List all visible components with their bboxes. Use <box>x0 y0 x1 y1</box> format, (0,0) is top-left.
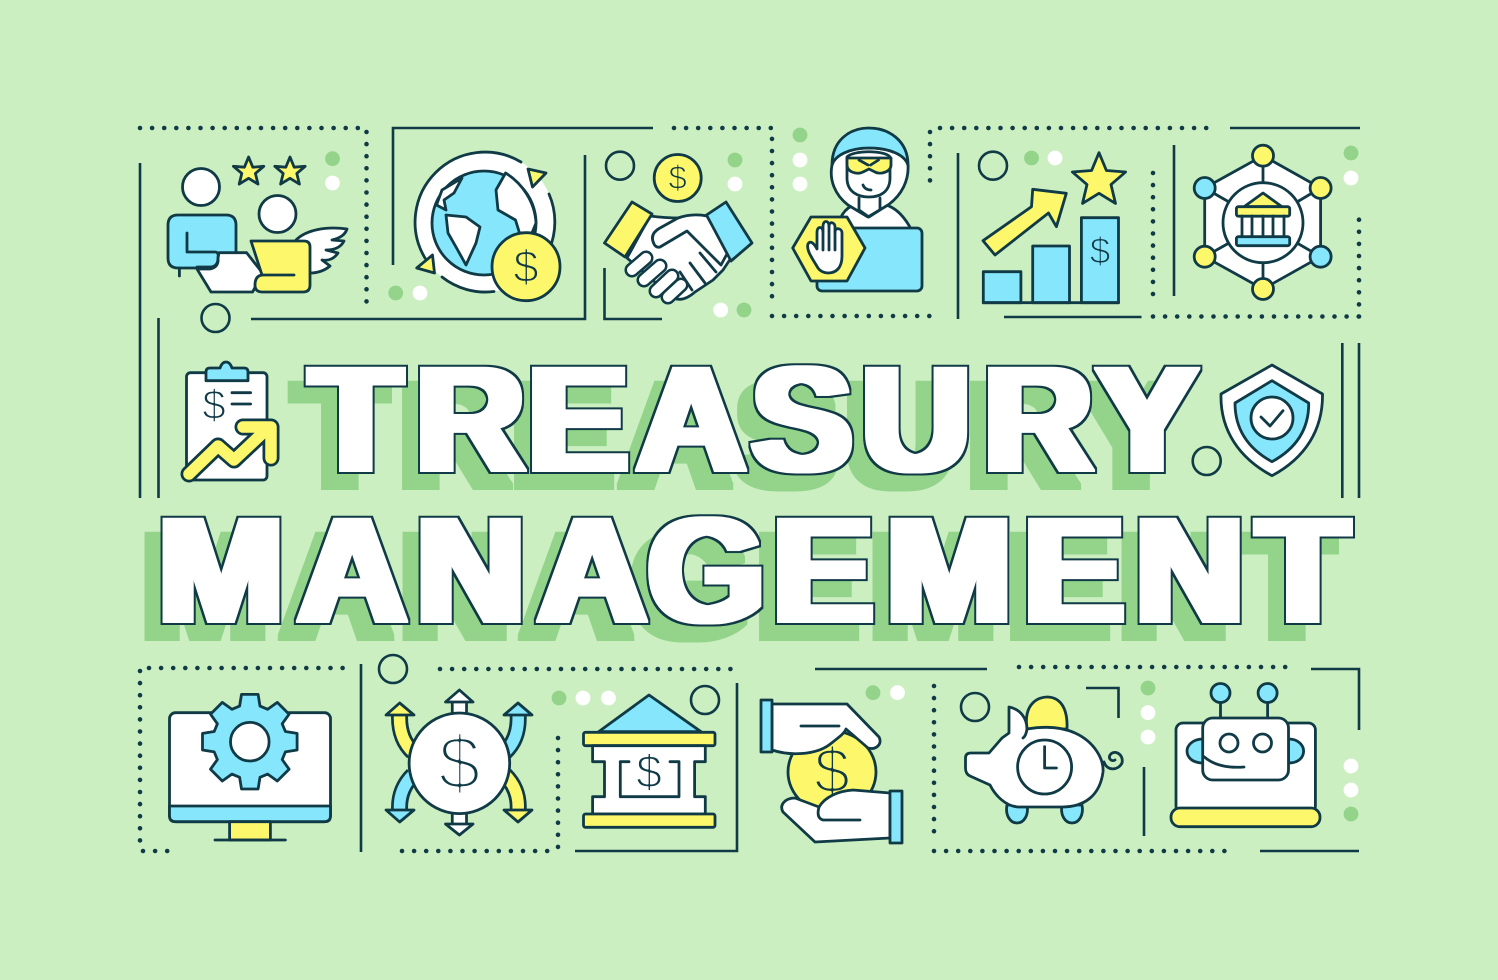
icon: financial report clipboard: $ <box>202 381 226 428</box>
icon: hands holding coin: $ <box>814 735 850 807</box>
icon: business angel investors <box>168 157 347 292</box>
icon: cash flow arrows: $ <box>438 721 481 806</box>
icon: growth bar chart with star: $ <box>1090 230 1110 272</box>
icon: cash flow arrows <box>386 690 532 835</box>
icon: bank building <box>584 695 715 827</box>
icon: robo-advisor laptop <box>1171 684 1320 827</box>
title <box>158 335 1349 654</box>
icon: hands holding coin <box>761 700 902 843</box>
icon: handshake deal: $ <box>669 159 687 196</box>
icon: global money circulation: $ <box>513 241 539 292</box>
icon: piggy bank with clock <box>966 697 1122 823</box>
icon: bank building: $ <box>636 746 662 798</box>
icon: monitor with gear <box>170 694 330 840</box>
title: MANAGEMENT <box>158 486 1349 654</box>
icon: financial report clipboard <box>186 362 271 480</box>
title: TREASURY <box>310 335 1197 503</box>
icon: handshake deal <box>604 154 752 299</box>
icon: global money circulation <box>415 152 560 301</box>
icon: hacker blocked <box>793 128 922 291</box>
icon: growth bar chart with star <box>983 153 1126 303</box>
icon: security shield <box>1221 365 1323 476</box>
icon: bank network <box>1194 145 1331 300</box>
